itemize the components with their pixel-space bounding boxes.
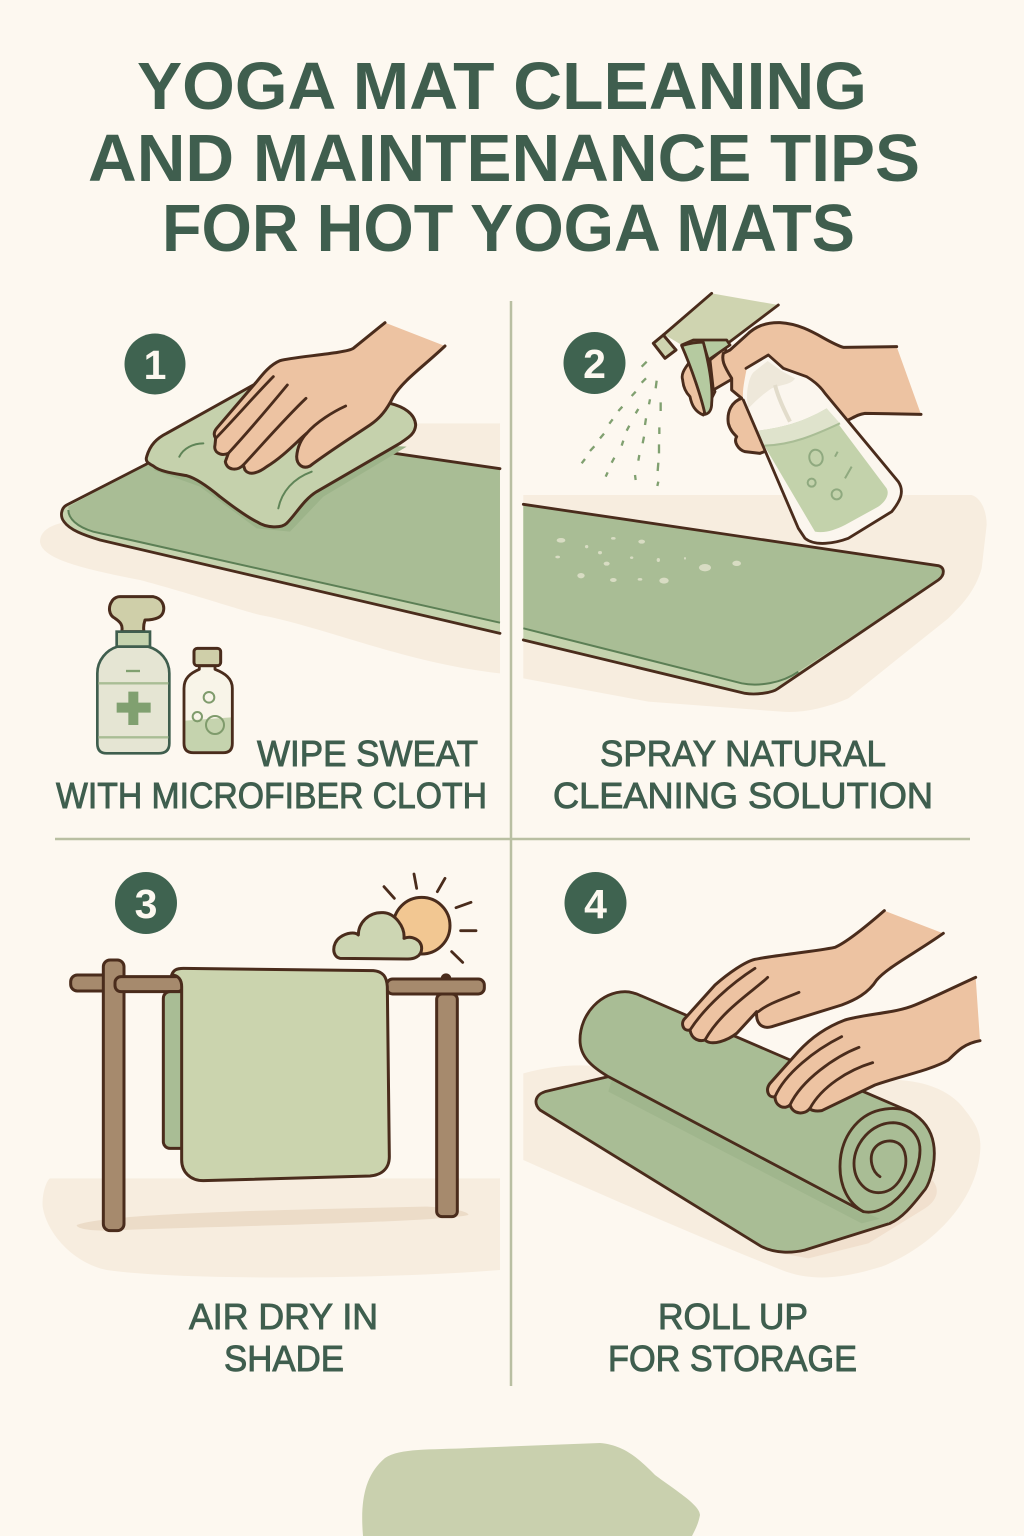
- title: FOR HOT YOGA MATS: [162, 191, 855, 266]
- title: AND MAINTENANCE TIPS: [88, 121, 920, 196]
- illustration: hands rolling the mat: [523, 911, 980, 1277]
- panel: step 4 roll up: [523, 872, 980, 1379]
- number badge 1: [124, 334, 186, 394]
- panel: step 2 spray solution: [523, 293, 987, 816]
- illustration: mat on drying rack with sun and cloud: [43, 874, 500, 1277]
- caption: spray solution: CLEANING SOLUTION: [553, 775, 933, 816]
- title: YOGA MAT CLEANING: [137, 49, 867, 124]
- caption: wipe sweat: WIPE SWEAT: [257, 733, 478, 774]
- caption: air dry: [189, 1296, 378, 1379]
- caption: roll up: ROLL UP: [658, 1296, 808, 1337]
- number badge 4: 4: [584, 881, 607, 927]
- number badge 2: 2: [583, 341, 606, 387]
- number badge 2: [564, 332, 626, 394]
- caption: roll up: [608, 1296, 857, 1379]
- decorative green blob at bottom: [362, 1443, 700, 1536]
- caption: roll up: FOR STORAGE: [608, 1338, 857, 1379]
- title: [88, 49, 920, 266]
- number badge 3: [115, 872, 177, 934]
- caption: wipe sweat: [56, 733, 487, 816]
- number badge 1: 1: [144, 342, 166, 388]
- number badge 4: [564, 872, 626, 934]
- number badge 3: 3: [135, 881, 157, 927]
- illustration: mat, cloth, hand and bottles: [40, 323, 500, 753]
- caption: spray solution: SPRAY NATURAL: [600, 733, 886, 774]
- caption: spray solution: [553, 733, 933, 816]
- caption: air dry: AIR DRY IN: [189, 1296, 378, 1337]
- illustration: mat, spray bottle and hand: [523, 293, 987, 712]
- caption: air dry: SHADE: [224, 1338, 344, 1379]
- panel: step 1 wipe sweat: [40, 323, 500, 816]
- panel: step 3 air dry: [43, 872, 500, 1379]
- caption: wipe sweat: WITH MICROFIBER CLOTH: [56, 775, 487, 816]
